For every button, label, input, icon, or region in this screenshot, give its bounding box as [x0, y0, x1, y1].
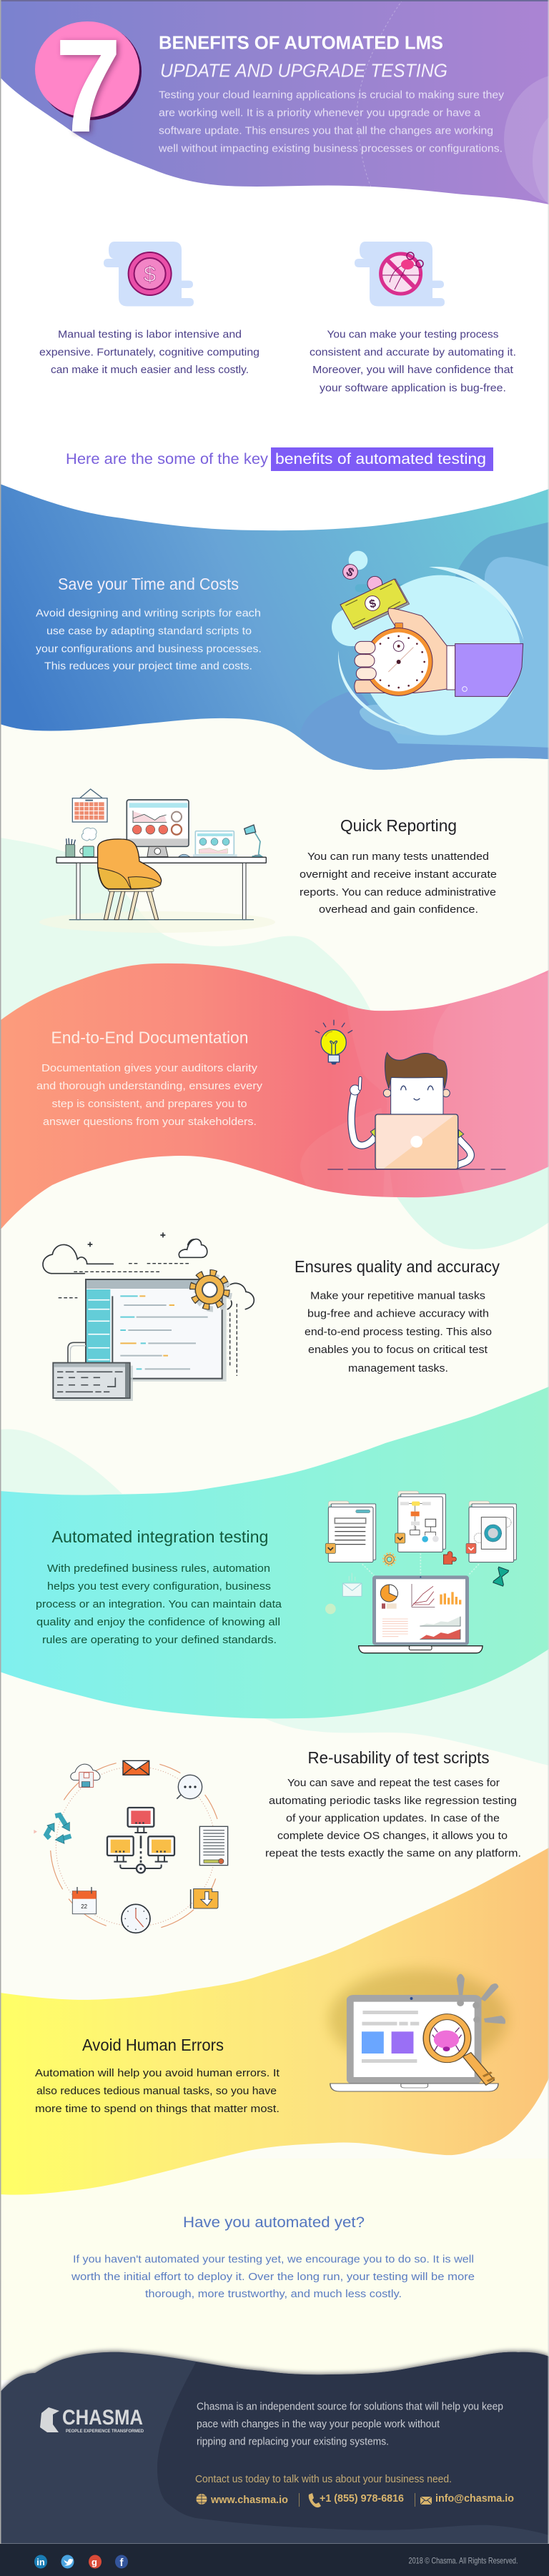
page edge right: [548, 0, 549, 2544]
header banner: [0, 0, 549, 204]
icon: mail: [420, 2497, 432, 2505]
heading: Save your Time and Costs: [58, 575, 239, 593]
footer wave: [0, 2352, 549, 2576]
body text: overnight and receive instant accurate: [300, 868, 497, 881]
footer darker shape: [157, 2352, 549, 2535]
social icons: f: [120, 2557, 124, 2569]
body text: [265, 1777, 521, 1860]
cream lower background: [0, 715, 549, 2380]
pink wave: [0, 963, 549, 1230]
right intro text: consistent and accurate by automating it.: [310, 346, 516, 359]
body text: rules are operating to your defined standards.: [42, 1634, 277, 1646]
body text: enables you to focus on critical test: [308, 1344, 488, 1356]
heading highlight box: [271, 447, 493, 471]
panel: footer: [0, 2352, 549, 2576]
title line 2: UPDATE AND UPGRADE TESTING: [160, 60, 447, 81]
body text: overhead and gain confidence.: [319, 903, 478, 916]
number badge circle: [35, 21, 139, 117]
pink lobes: [383, 974, 548, 1197]
decor: mint blob below pink wave: [390, 1158, 549, 1249]
body text: use case by adapting standard scripts to: [46, 625, 252, 638]
body text: Documentation gives your auditors clarity: [41, 1062, 258, 1074]
body text: management tasks.: [348, 1362, 448, 1374]
body text: step is consistent, and prepares you to: [51, 1098, 247, 1110]
social icons: g: [92, 2557, 97, 2567]
social icons: in: [36, 2557, 45, 2567]
website: www.chasma.io: [210, 2494, 288, 2506]
body text: bug-free and achieve accuracy with: [307, 1308, 489, 1320]
heading: Re-usability of test scripts: [307, 1748, 489, 1767]
body text: [36, 1062, 263, 1128]
body text: You can save and repeat the test cases for: [287, 1777, 500, 1789]
blue wave: [0, 484, 549, 770]
right intro text: You can make your testing process: [327, 328, 499, 340]
left intro text: Manual testing is labor intensive and: [58, 328, 242, 340]
intro text: Testing your cloud learning applications is crucial to making sure they: [159, 89, 505, 101]
body text: With predefined business rules, automation: [47, 1562, 270, 1575]
title line 1: BENEFITS OF AUTOMATED LMS: [159, 31, 443, 53]
panel: automated integration testing: [0, 1387, 549, 1718]
yellow wave: [0, 1848, 549, 2195]
heading text left: Here are the some of the key: [66, 451, 269, 467]
heading: Ensures quality and accuracy: [295, 1257, 500, 1276]
left intro text: expensive. Fortunately, cognitive computing: [39, 346, 259, 359]
body text: reports. You can reduce administrative: [300, 886, 496, 898]
email: info@chasma.io: [435, 2492, 514, 2505]
panel: have you automated yet: [71, 2214, 475, 2300]
social icons: [34, 2555, 128, 2569]
body text: [36, 608, 262, 672]
heading: Automated integration testing: [51, 1527, 269, 1546]
illustration: stopwatch in hand: $: [344, 565, 357, 580]
about text: pace with changes in the way your people work without: [197, 2419, 440, 2430]
heading: Avoid Human Errors: [82, 2036, 224, 2054]
body text: also reduces tedious manual tasks, so you have: [36, 2085, 277, 2097]
illustration: stopwatch in hand: [300, 522, 549, 777]
intro text: well without impacting existing business processes or configurations.: [158, 143, 503, 154]
intro text: [158, 89, 505, 154]
illustration: desk: [56, 789, 266, 920]
body text: repeat the tests exactly the same on any platform.: [265, 1848, 521, 1860]
body text: [300, 851, 497, 916]
intro text: are working well. It is a priority whenever you upgrade or have a: [159, 107, 481, 119]
contact line: Contact us today to talk with us about your business need.: [195, 2474, 452, 2485]
body text: automating periodic tasks like regression testing: [269, 1795, 517, 1807]
body text: and thorough understanding, ensures every: [36, 1080, 263, 1092]
body text: answer questions from your stakeholders.: [43, 1116, 257, 1128]
right intro text: Moreover, you will have confidence that: [312, 364, 514, 376]
illustration: man with laptop: [315, 1020, 505, 1169]
body text: Automation will help you avoid human errors. It: [35, 2067, 280, 2079]
body text: If you haven't automated your testing yet, we encourage you to do so. It is well: [73, 2254, 474, 2266]
illustration: process circle: 22: [81, 1903, 88, 1910]
heading: Have you automated yet?: [183, 2214, 365, 2231]
body text: of your application updates. In case of the: [286, 1813, 500, 1825]
decor: floor shadow: [39, 911, 275, 933]
right intro text: your software application is bug-free.: [320, 382, 506, 394]
heading: Quick Reporting: [340, 816, 457, 835]
heading: key benefits: [66, 447, 493, 471]
illustration: documents and laptop: [325, 1491, 516, 1653]
about text: [197, 2402, 503, 2448]
body text: complete device OS changes, it allows you to: [277, 1830, 508, 1842]
icon: coin: [104, 242, 194, 306]
body text: [305, 1289, 492, 1374]
number badge shadow circle: [37, 23, 142, 120]
illustration: process circle: [34, 1760, 228, 1933]
contact details: [196, 2492, 514, 2507]
heading: End-to-End Documentation: [51, 1029, 249, 1047]
body text: process or an integration. You can maintain data: [36, 1598, 282, 1610]
body text: thorough, more trustworthy, and much less costly.: [145, 2288, 402, 2300]
body text: [36, 1562, 282, 1646]
mint wave: [0, 1387, 549, 1718]
body text: Avoid designing and writing scripts for each: [36, 608, 261, 619]
logo: PEOPLE EXPERIENCE TRANSFORMED: [66, 2429, 144, 2434]
panel: avoid human errors: [0, 1848, 549, 2195]
body text: [71, 2254, 475, 2300]
decor: pale blob below mint wave: [250, 1644, 549, 1765]
illustration: code window: [43, 1232, 254, 1401]
intro text: software update. This ensures you that all the changes are working: [159, 124, 493, 137]
body text: You can run many tests unattended: [307, 851, 489, 863]
about text: ripping and replacing your existing systems.: [197, 2437, 389, 2448]
decor: mint blob behind quick reporting: [0, 838, 371, 1072]
icon: coin: $: [144, 262, 156, 287]
panel: save your time and costs: [0, 484, 549, 777]
logo: CHASMA: [62, 2406, 143, 2429]
panel: quick reporting: [56, 789, 497, 920]
body text: more time to spend on things that matter most.: [35, 2103, 280, 2115]
panel: re-usability of test scripts: [34, 1748, 521, 1933]
body text: Make your repetitive manual tasks: [310, 1289, 485, 1302]
right intro text: [310, 328, 516, 394]
body text: [35, 2067, 280, 2115]
left intro text: [39, 328, 259, 376]
closing cream background: [0, 2159, 549, 2380]
logo: [40, 2406, 144, 2434]
header lobes: [0, 0, 549, 211]
footer bottom bar: [0, 2544, 549, 2576]
icon: phone: [309, 2493, 321, 2507]
panel: intro columns: [39, 242, 516, 394]
big number 7 shadow: 7: [57, 14, 124, 162]
icon: no bugs: [355, 242, 445, 306]
body text: This reduces your project time and costs.: [44, 660, 252, 672]
decor: pale blob above mint wave: [0, 1429, 122, 1501]
heading highlighted text: benefits of automated testing: [275, 451, 486, 467]
copyright: 2018 © Chasma. All Rights Reserved.: [409, 2556, 518, 2566]
icon: globe: [196, 2494, 207, 2505]
page edge left: [0, 0, 1, 2544]
body text: end-to-end process testing. This also: [305, 1326, 492, 1338]
body text: helps you test every configuration, business: [47, 1580, 271, 1592]
separator: [299, 2493, 300, 2507]
phone: +1 (855) 978-6816: [320, 2492, 404, 2505]
illustration: stopwatch in hand: $: [368, 598, 377, 611]
bar highlight: [0, 2543, 549, 2544]
body text: worth the initial effort to deploy it. Over the long run, your testing will be more: [71, 2271, 475, 2283]
body text: your configurations and business processes.: [36, 643, 262, 655]
panel: ensures quality and accuracy: [43, 1232, 500, 1401]
panel: header: [0, 0, 549, 211]
big number 7: 7: [55, 12, 122, 160]
left intro text: can make it much easier and less costly.: [51, 364, 249, 376]
body text: quality and enjoy the confidence of knowing all: [36, 1616, 280, 1628]
panel: end-to-end documentation: [0, 963, 549, 1246]
about text: Chasma is an independent source for solutions that will help you keep: [197, 2402, 503, 2413]
illustration: laptop with bug: [329, 1969, 508, 2091]
